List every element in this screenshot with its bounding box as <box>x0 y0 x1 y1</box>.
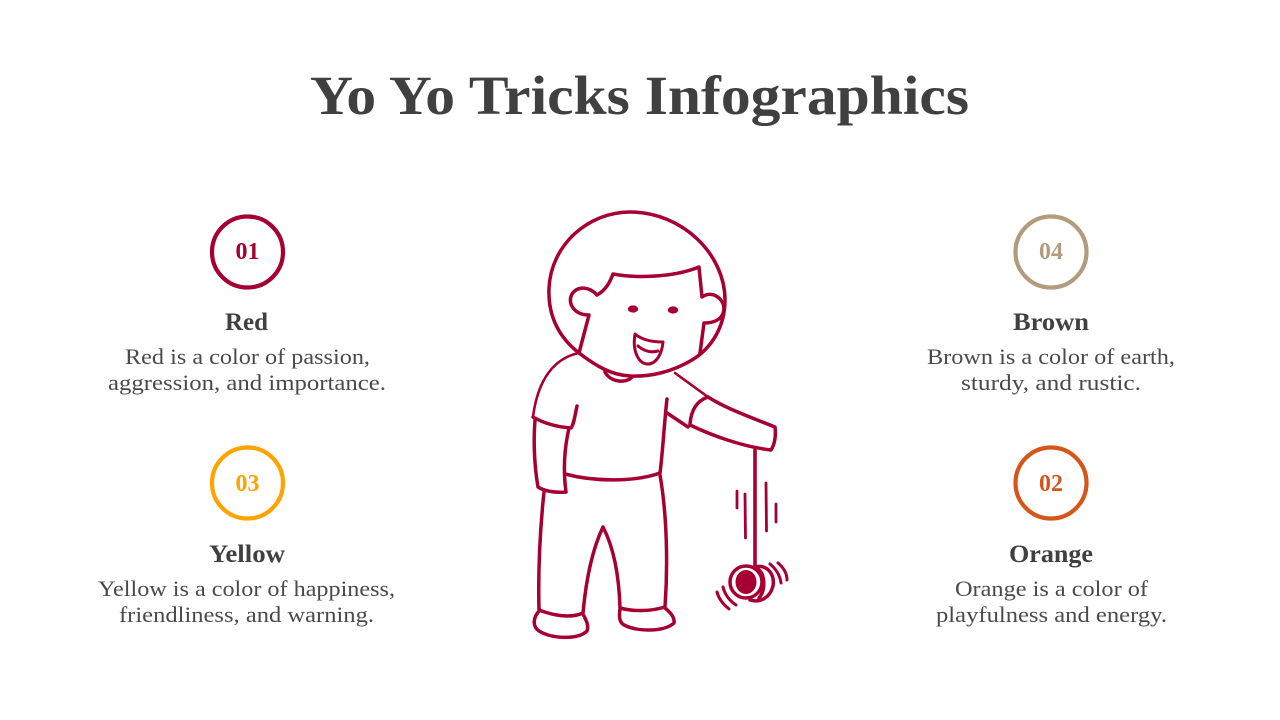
heading: red: Red <box>225 309 268 336</box>
motion lines <box>737 483 776 538</box>
collar <box>605 372 632 381</box>
illustration: boy playing yo-yo <box>533 212 787 637</box>
badge 02 <box>1016 448 1086 518</box>
heading: brown: Brown <box>1013 309 1089 336</box>
head outline <box>549 212 725 376</box>
badge 01 <box>212 216 283 288</box>
badge 03: 03 <box>236 471 260 497</box>
shirt hem and torso <box>565 399 667 480</box>
description: yellow: friendliness, and warning. <box>119 602 374 627</box>
description: orange <box>936 576 1167 627</box>
spin arcs <box>717 563 787 609</box>
title: Yo Yo Tricks Infographics <box>310 65 969 126</box>
hair and ears <box>570 267 724 353</box>
panel: 02 orange <box>936 448 1167 627</box>
description: orange: playfulness and energy. <box>936 602 1167 627</box>
yo-yo string <box>753 449 757 568</box>
panel: 04 brown <box>927 216 1175 395</box>
badge 01: 01 <box>236 239 260 265</box>
pants <box>539 475 667 616</box>
right sleeve <box>675 373 708 397</box>
badge 04 <box>1016 216 1086 288</box>
right arm <box>690 397 775 450</box>
description: yellow: Yellow is a color of happiness, <box>98 576 395 601</box>
description: red <box>108 344 386 395</box>
description: red: Red is a color of passion, <box>125 344 370 369</box>
shirt and left sleeve <box>533 353 579 417</box>
heading: yellow: Yellow <box>209 541 285 568</box>
yo-yo <box>717 563 787 609</box>
badge 03 <box>212 448 283 518</box>
right shoe <box>619 608 674 630</box>
badge 02: 02 <box>1039 471 1063 497</box>
panel: 01 red <box>108 216 386 395</box>
left arm <box>534 420 569 492</box>
description: brown: Brown is a color of earth, <box>927 344 1175 369</box>
mouth <box>634 334 663 364</box>
eyes <box>628 305 678 314</box>
description: brown: sturdy, and rustic. <box>961 370 1141 395</box>
description: brown <box>927 344 1175 395</box>
heading: orange: Orange <box>1009 541 1093 568</box>
left shoe <box>534 610 588 637</box>
description: orange: Orange is a color of <box>955 576 1149 601</box>
badge 04: 04 <box>1039 239 1063 265</box>
panel: 03 yellow <box>98 448 395 627</box>
description: red: aggression, and importance. <box>108 370 386 395</box>
description: yellow <box>98 576 395 627</box>
